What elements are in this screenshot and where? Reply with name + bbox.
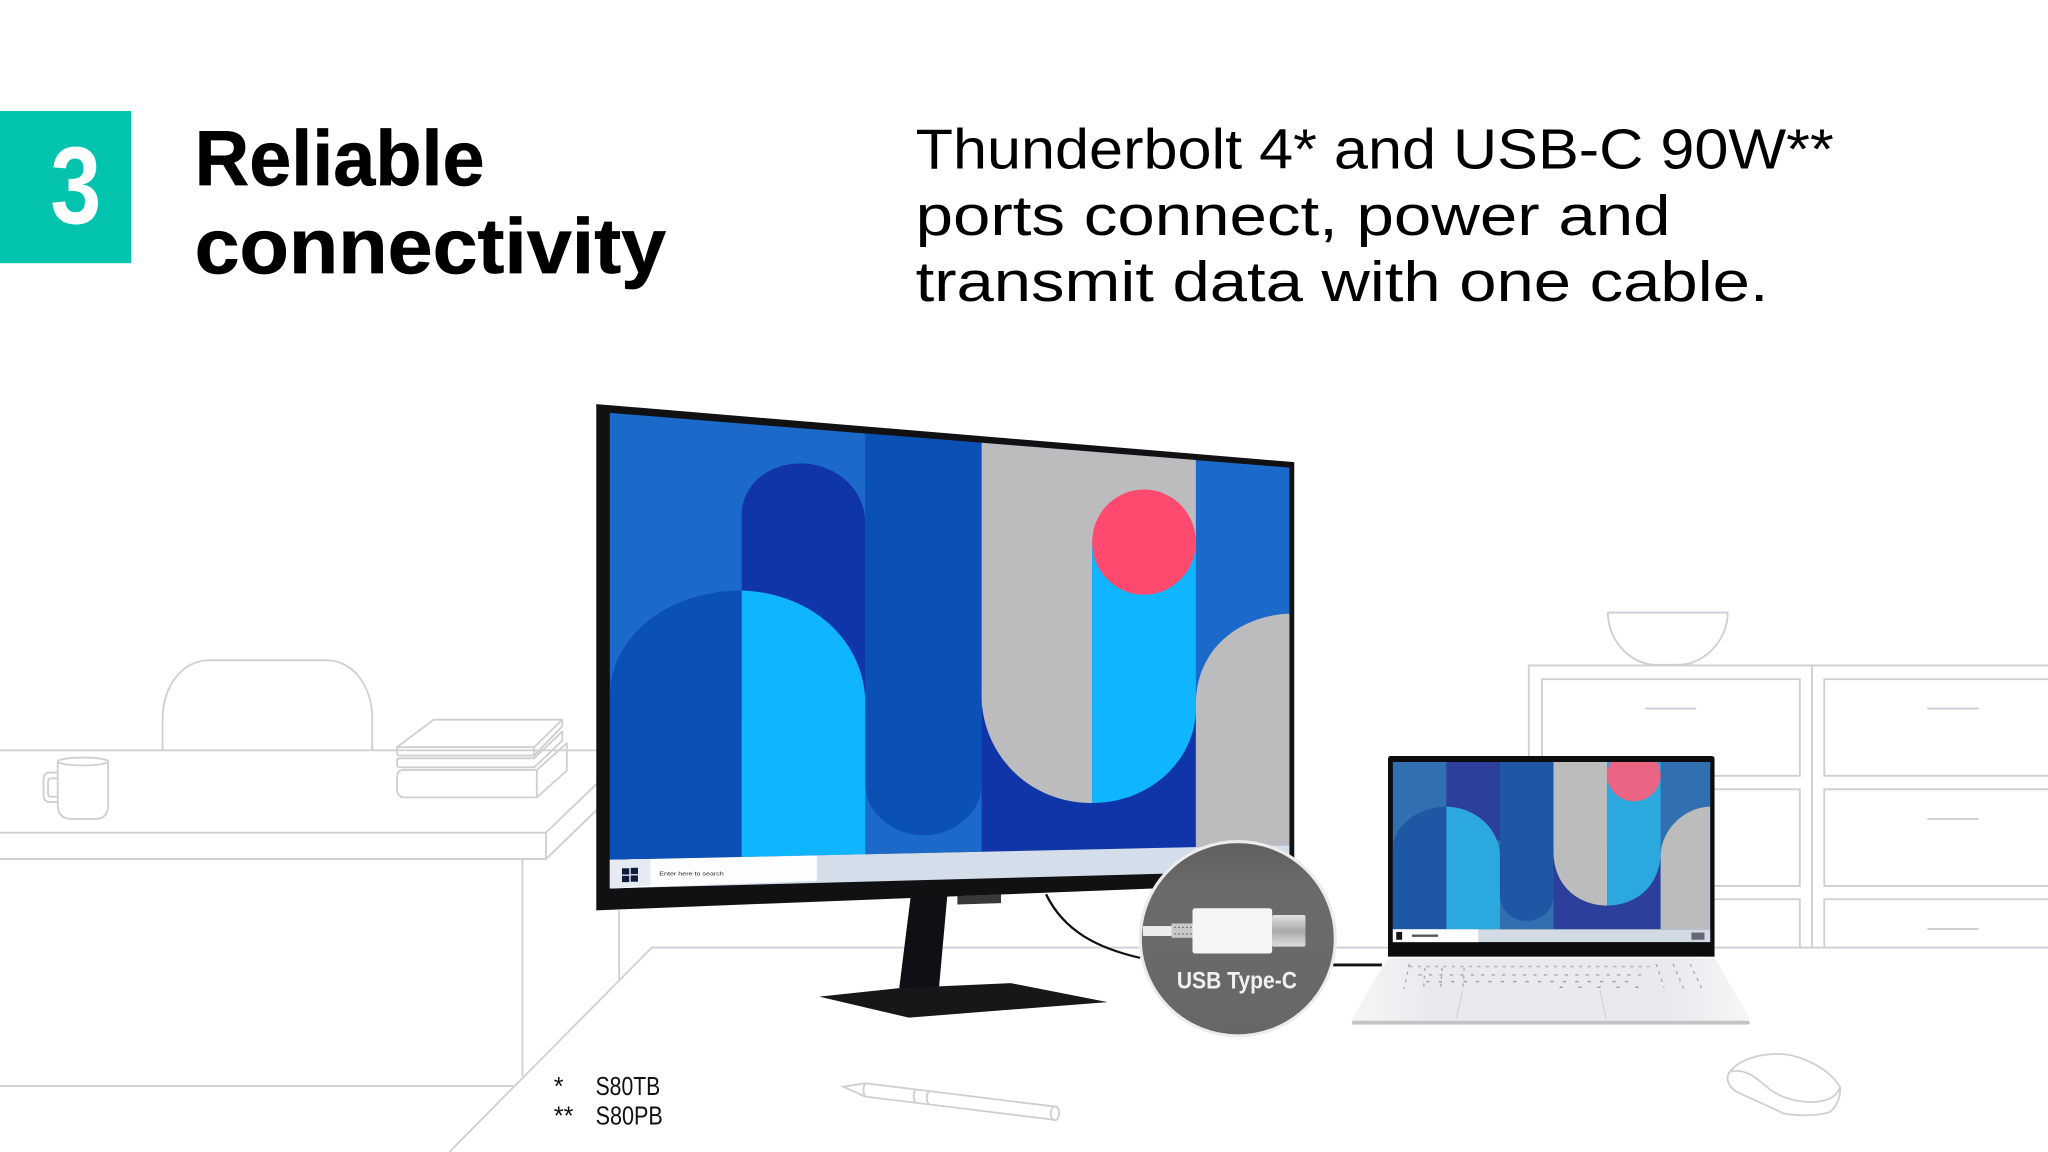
stack of books bbox=[397, 720, 567, 797]
footnotes: S80TB bbox=[596, 1073, 660, 1101]
title bbox=[195, 114, 667, 290]
mug bbox=[43, 758, 108, 819]
wallpaper bbox=[610, 413, 1289, 860]
footnotes: * bbox=[554, 1073, 564, 1101]
chair back bbox=[163, 660, 372, 750]
taskbar: Enter here to search bbox=[659, 871, 724, 877]
footnotes bbox=[554, 1073, 663, 1131]
monitor bbox=[596, 404, 1294, 1018]
usb-c callout bbox=[1140, 842, 1335, 1036]
number badge: 3 bbox=[50, 125, 101, 247]
laptop bezel bbox=[1388, 756, 1715, 957]
desk bbox=[0, 750, 619, 1086]
usb-c label: USB Type-C bbox=[1177, 967, 1297, 994]
cable to usb-c callout bbox=[1046, 894, 1140, 958]
description text: ports connect, power and bbox=[916, 184, 1671, 247]
taskbar bbox=[610, 845, 1289, 888]
pencil bbox=[843, 1083, 1059, 1120]
title: Reliable bbox=[195, 114, 485, 202]
bowl bbox=[1608, 613, 1728, 665]
laptop base bbox=[1352, 956, 1750, 1025]
laptop bbox=[1352, 756, 1750, 1025]
title: connectivity bbox=[195, 202, 667, 290]
footnotes: ** bbox=[554, 1103, 574, 1131]
cable between callout and laptop bbox=[1332, 964, 1382, 966]
description text: transmit data with one cable. bbox=[916, 250, 1768, 313]
footnotes: S80PB bbox=[596, 1103, 663, 1131]
cabinet bbox=[1529, 665, 2048, 947]
floor and back table lines bbox=[449, 948, 2048, 1152]
stand bbox=[819, 891, 1108, 1018]
number badge bbox=[0, 111, 131, 263]
laptop wallpaper bbox=[1393, 762, 1710, 929]
laptop taskbar bbox=[1393, 929, 1710, 942]
monitor bezel bbox=[596, 404, 1294, 910]
mouse bbox=[1728, 1054, 1840, 1115]
usb-c plug bbox=[1143, 908, 1305, 953]
description text bbox=[916, 117, 1834, 313]
description text: Thunderbolt 4* and USB-C 90W** bbox=[916, 117, 1834, 180]
keyboard keys bbox=[1404, 964, 1702, 989]
line-art room background bbox=[0, 613, 2048, 1152]
